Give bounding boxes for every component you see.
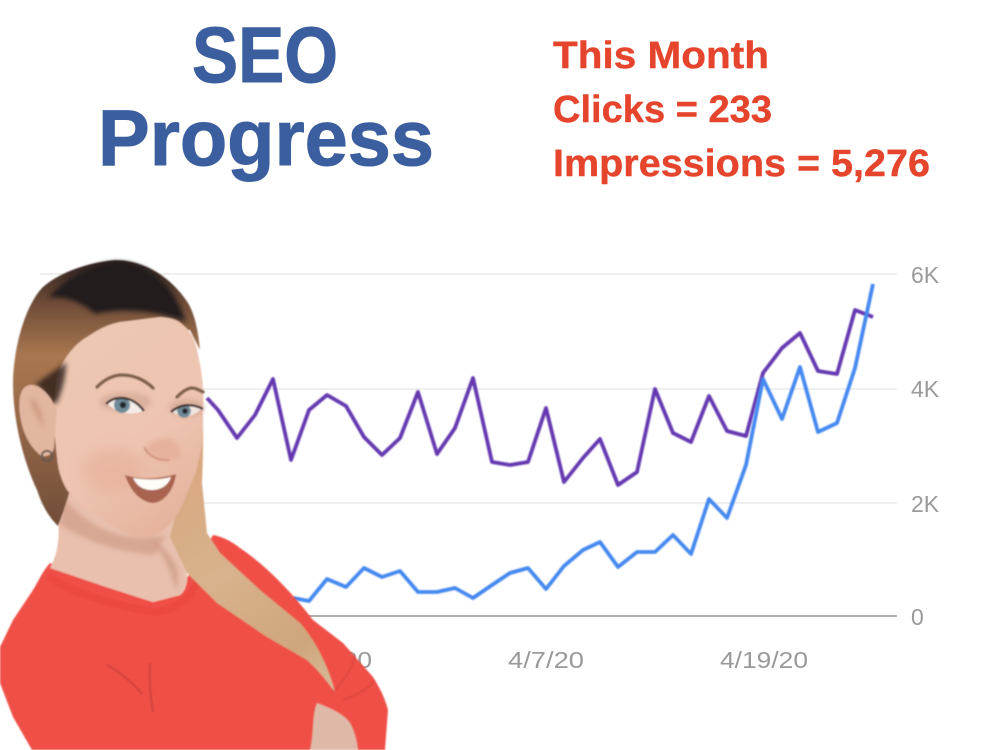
monthly stats: Impressions = 5,276 [553,143,930,185]
long hair [170,350,335,692]
title: SEO [192,10,338,99]
purple line: impressions [207,310,873,485]
y axis labels: 0 [911,604,924,630]
ear [19,385,57,456]
blue line: clicks [293,284,873,601]
y axis labels [911,262,940,630]
smile [125,474,176,503]
right eye socket [169,399,205,417]
hand [310,703,358,750]
sweater folds [107,655,375,712]
y axis labels: 4K [911,376,940,402]
left eye socket [99,392,151,412]
jaw shadow [60,495,165,555]
nose [144,438,180,460]
sweater [0,535,388,750]
portrait of woman in red sweater [0,260,388,750]
title: Progress [98,93,434,182]
y axis labels: 6K [911,262,940,288]
y axis labels: 2K [911,491,940,517]
monthly stats: This Month [553,35,769,77]
title [98,10,434,182]
left eye [106,397,144,414]
ear shadow [30,398,44,428]
face [54,317,203,537]
right eye [171,404,203,418]
temple shadow [36,362,66,405]
x axis labels: 4/19/20 [720,647,808,673]
neck [50,478,187,602]
x axis labels: 3/26/20 [284,647,372,673]
dark crown [48,262,186,322]
monthly stats: Clicks = 233 [553,89,772,131]
cheek blush [82,448,142,492]
monthly stats [553,35,930,185]
x axis labels: 4/7/20 [508,647,584,673]
x axis labels [284,647,808,673]
back hair [13,260,200,526]
eyebrows [97,375,203,397]
earring [42,451,52,461]
neck shadow [150,538,178,590]
sweater collar shading [48,576,198,612]
line chart [40,262,940,673]
